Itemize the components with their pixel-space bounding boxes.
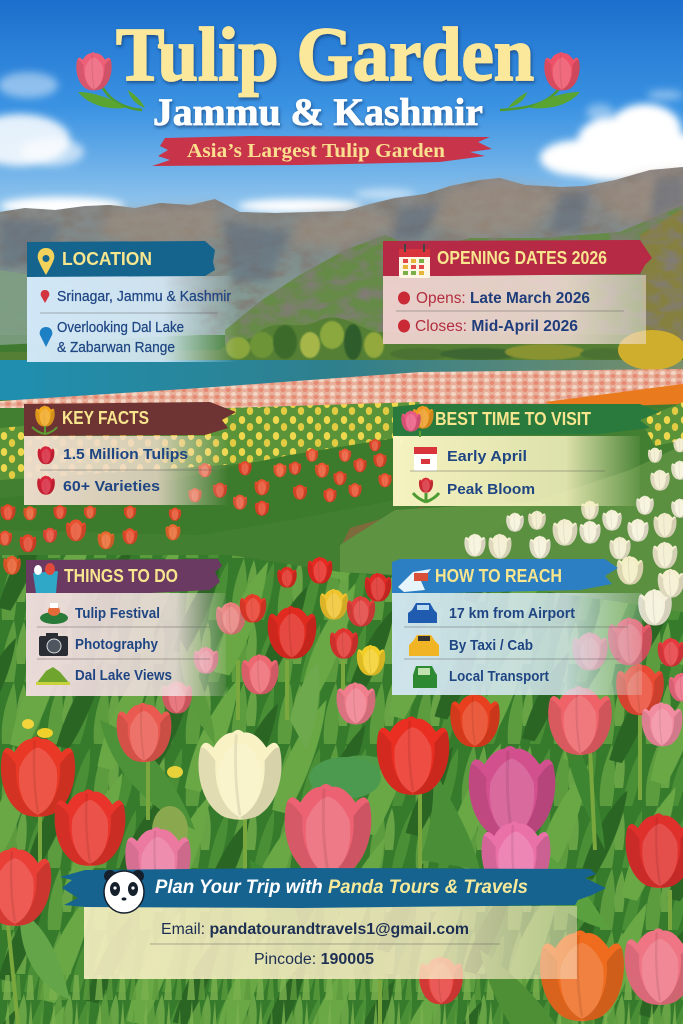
white tulip bed flowers: [464, 438, 683, 569]
foreground grass: [0, 975, 683, 1024]
icon: panda logo: [104, 870, 144, 913]
text: peak bloom: Peak Bloom: [447, 481, 535, 498]
panel: best time to visit: [393, 404, 660, 506]
panel: key facts: [24, 402, 236, 505]
tagline banner: [152, 136, 492, 166]
icon: camera: [39, 633, 68, 656]
text: photography: Photography: [75, 636, 159, 653]
red tulip bed base: [0, 438, 395, 535]
text: tulip festival: Tulip Festival: [75, 605, 160, 622]
icon: travel: [398, 569, 431, 592]
panel: location: [27, 241, 237, 362]
icon: left tulip: [76, 52, 145, 110]
icon: calendar small: [414, 447, 437, 471]
panel: contact footer: [60, 868, 606, 979]
best time body: [393, 436, 640, 506]
bullet: opens: [398, 292, 410, 304]
red tulip bed flowers: [0, 439, 392, 575]
icon: twin tulips: [401, 406, 434, 437]
footer body: [84, 906, 577, 979]
trees and shrubs: [226, 321, 630, 360]
text: footer heading: Plan Your Trip with Panda Tours & Travels: [155, 877, 528, 898]
clouds: [0, 72, 683, 215]
middle tulips: [162, 556, 683, 724]
location header: [27, 241, 215, 277]
reach body: [392, 593, 642, 695]
panel: things to do: [26, 559, 226, 696]
opening body: [383, 275, 646, 344]
scattered small flowers: [22, 719, 183, 778]
foreground blades overlay: [0, 555, 683, 1024]
reach header: [392, 559, 618, 593]
text: Srinagar: Srinagar, Jammu & Kashmir: [57, 288, 231, 305]
title block: [76, 13, 580, 166]
large foreground tulips: [0, 664, 683, 1021]
icon: hills: [36, 667, 70, 685]
mid field base: [0, 408, 683, 578]
icon: green car: [413, 666, 437, 688]
text: opens: Opens: Late March 2026: [416, 290, 590, 307]
heading: how to reach: HOW TO REACH: [435, 566, 562, 586]
icon: yellow tulip: [32, 406, 57, 434]
icon: festival: [40, 603, 68, 624]
key facts body: [24, 436, 229, 505]
icon: tulip small: [413, 477, 439, 502]
text: overlooking: Overlooking Dal Lake: [57, 319, 184, 336]
title: Tulip Garden: Tulip Garden: [116, 13, 534, 97]
icon: blue car: [408, 603, 437, 623]
text: varieties: 60+ Varieties: [63, 478, 160, 495]
bullet: closes: [398, 320, 410, 332]
mountains: [0, 167, 683, 335]
icon: red tulip bullet 2: [37, 476, 55, 495]
yellow tulip bed right: [640, 402, 683, 446]
things header: [26, 559, 222, 593]
tagline banner: Asia’s Largest Tulip Garden: [187, 140, 445, 162]
yellow tulip bed: [0, 402, 420, 480]
subtitle: Jammu & Kashmir: Jammu & Kashmir: [153, 91, 483, 134]
icon: location pin: [38, 248, 54, 275]
opening header: [383, 240, 652, 276]
green ground right: [465, 445, 683, 615]
text: local transport: Local Transport: [449, 668, 549, 685]
things body: [26, 593, 226, 696]
footer header: [60, 868, 606, 908]
hillside right: [640, 208, 683, 345]
tree line: [0, 318, 640, 362]
location body: [27, 276, 237, 362]
text: range: & Zabarwan Range: [57, 339, 175, 356]
mountain shadow folds: [0, 175, 683, 282]
tulip stems: [8, 660, 670, 1024]
text: closes: Closes: Mid-April 2026: [415, 318, 578, 335]
text: early april: Early April: [447, 448, 527, 465]
sky: [0, 0, 683, 235]
best time header: [393, 404, 660, 436]
heading: opening dates: OPENING DATES 2026: [437, 248, 607, 268]
key facts header: [24, 402, 236, 436]
foreground foliage: [0, 555, 683, 1024]
icon: festival basket: [33, 563, 58, 593]
icon: red pin: [41, 290, 49, 303]
orange tulip strip: [545, 384, 683, 408]
yellow bush: [618, 330, 683, 370]
text: dal lake views: Dal Lake Views: [75, 667, 172, 684]
green hill slopes: [225, 205, 683, 345]
text: tulips count: 1.5 Million Tulips: [63, 446, 188, 463]
text: pincode: Pincode: 190005: [254, 951, 374, 968]
text: airport: 17 km from Airport: [449, 605, 575, 622]
heading: best time: BEST TIME TO VISIT: [435, 409, 591, 429]
panel: how to reach: [392, 559, 642, 695]
mountain warm tones: [100, 172, 683, 250]
text: email: Email: pandatourandtravels1@gmail.com: [161, 921, 469, 938]
heading: location: LOCATION: [62, 249, 152, 269]
icon: calendar: [399, 244, 430, 278]
heading: things to do: THINGS TO DO: [64, 566, 178, 586]
heading: key facts: KEY FACTS: [62, 408, 149, 428]
panel: opening dates: [383, 240, 652, 344]
soil path: [340, 506, 425, 548]
green mid strip: [340, 500, 560, 580]
icon: right tulip: [500, 52, 580, 110]
text: taxi: By Taxi / Cab: [449, 637, 533, 654]
icon: red tulip bullet 1: [38, 446, 54, 464]
lake: [0, 360, 683, 400]
icon: blue pin: [40, 327, 52, 347]
hazy left slope: [0, 270, 200, 345]
far tulip strips: [0, 369, 683, 424]
icon: taxi: [409, 635, 439, 656]
large leaves: [20, 640, 610, 1024]
